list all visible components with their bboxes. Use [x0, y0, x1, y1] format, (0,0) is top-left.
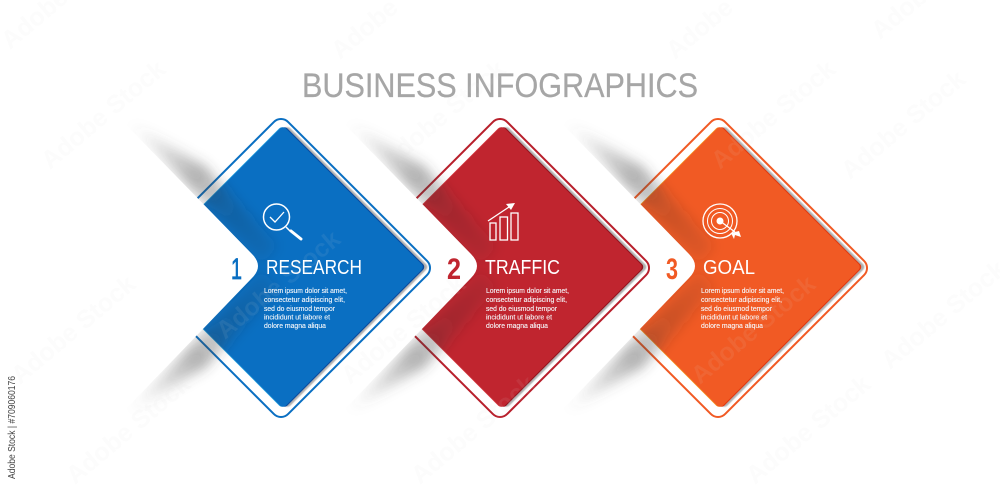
watermark pattern: Adobe Stock [36, 55, 171, 175]
watermark pattern: Adobe Stock [336, 270, 471, 390]
watermark pattern: Adobe Stock [686, 270, 821, 390]
text block: goal: Lorem ipsum dolor sit amet, [701, 286, 784, 295]
text block: research [264, 286, 347, 330]
text block: research: dolore magna aliqua [264, 321, 327, 330]
watermark pattern: Adobe Stock [406, 370, 541, 489]
text block: goal [701, 286, 784, 330]
heading: goal: GOAL [703, 257, 755, 279]
text block: traffic: dolore magna aliqua [486, 321, 549, 330]
text block: research: Lorem ipsum dolor sit amet, [264, 286, 347, 295]
watermark pattern: Adobe Stock [836, 65, 971, 185]
text block: traffic [486, 286, 569, 330]
text block: goal: incididunt ut labore et [701, 312, 767, 322]
text block: traffic: Lorem ipsum dolor sit amet, [486, 286, 569, 295]
number 2: 2 [447, 253, 461, 286]
watermark pattern: Adobe Stock [61, 370, 196, 489]
watermark pattern: Adobe Stock [376, 55, 511, 175]
text block: goal: consectetur adipiscing elit, [701, 295, 782, 304]
text block: traffic: sed do eiusmod tempor [486, 304, 557, 313]
text block: traffic: consectetur adipiscing elit, [486, 295, 567, 304]
watermark pattern: Adobe Stock [211, 225, 346, 345]
watermark pattern: Adobe Stock [741, 370, 876, 489]
title: BUSINESS INFOGRAPHICS [302, 67, 698, 105]
text block: research: sed do eiusmod tempor [264, 304, 335, 313]
number 3: 3 [666, 253, 678, 286]
heading: research: RESEARCH [266, 257, 362, 279]
text block: research: consectetur adipiscing elit, [264, 295, 345, 304]
watermark pattern: Adobe Stock [706, 55, 841, 175]
heading: traffic: TRAFFIC [485, 257, 560, 279]
text block: goal: sed do eiusmod tempor [701, 304, 772, 313]
watermark id text: Adobe Stock | #709060176 [6, 376, 18, 479]
icon: magnifier with check [264, 204, 301, 239]
icon: growth chart [488, 203, 518, 240]
panel: step 1 research [100, 98, 434, 436]
text block: traffic: incididunt ut labore et [486, 312, 552, 322]
icon: target with arrow [703, 204, 741, 239]
panel: step 2 traffic [319, 98, 653, 436]
text block: goal: dolore magna aliqua [701, 321, 764, 330]
watermark pattern: Adobe Stock [6, 270, 141, 390]
panel: step 3 goal [537, 98, 871, 436]
text block: research: incididunt ut labore et [264, 312, 330, 322]
number 1: 1 [231, 253, 242, 286]
